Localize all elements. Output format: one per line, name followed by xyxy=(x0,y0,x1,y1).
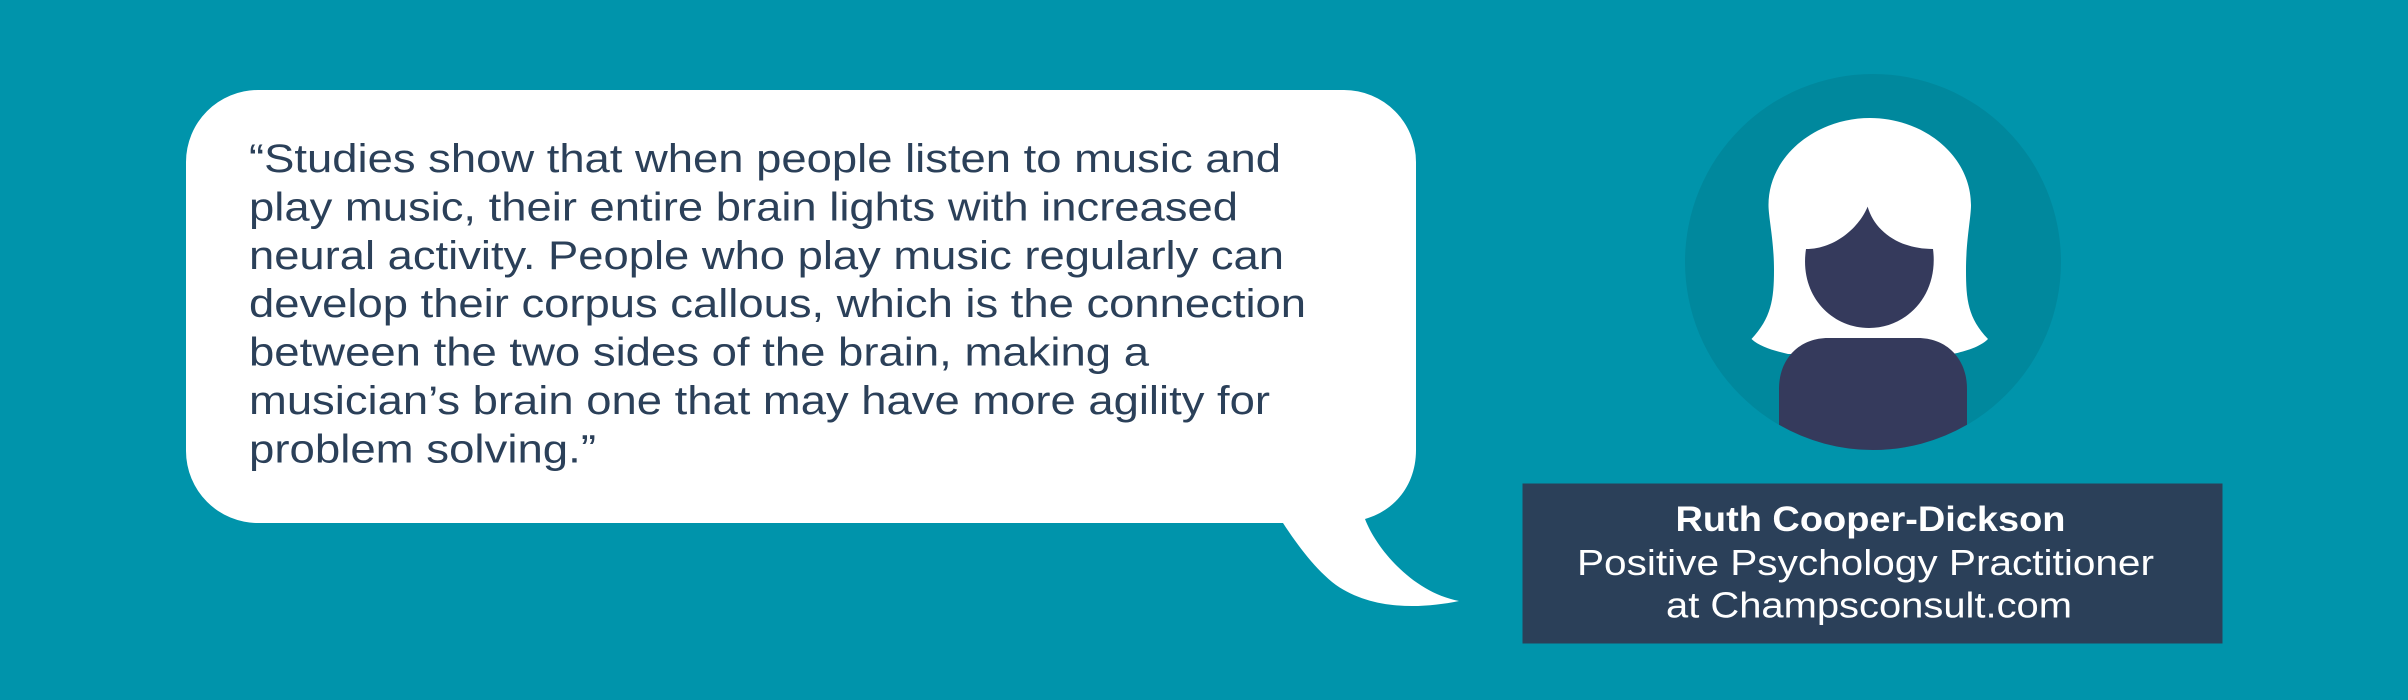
speaker role: Positive Psychology Practitioner xyxy=(1577,542,2154,583)
quote text: play music, their entire brain lights with increased xyxy=(249,185,1238,229)
avatar background circle xyxy=(1685,74,2061,450)
avatar hair xyxy=(1752,118,1988,354)
quote text: neural activity. People who play music regularly can xyxy=(249,234,1284,278)
panel: quote speech bubble xyxy=(186,90,1459,606)
speaker name: Ruth Cooper-Dickson xyxy=(1676,500,2066,539)
name plate background xyxy=(1522,484,2222,644)
quote text: “Studies show that when people listen to music and xyxy=(249,137,1281,181)
speech bubble shape with tail xyxy=(186,90,1459,606)
quote text: problem solving.” xyxy=(249,427,596,471)
quote text xyxy=(249,137,1306,471)
avatar face xyxy=(1805,207,1934,328)
icon: woman avatar xyxy=(1685,74,2061,450)
speaker website: at Champsconsult.com xyxy=(1666,584,2072,626)
quote text: between the two sides of the brain, making a xyxy=(249,331,1150,375)
avatar body xyxy=(1779,338,1967,450)
quote text: musician’s brain one that may have more agility for xyxy=(249,379,1270,423)
quote text: develop their corpus callous, which is the connection xyxy=(249,282,1306,326)
panel: attribution name plate xyxy=(1522,484,2222,644)
